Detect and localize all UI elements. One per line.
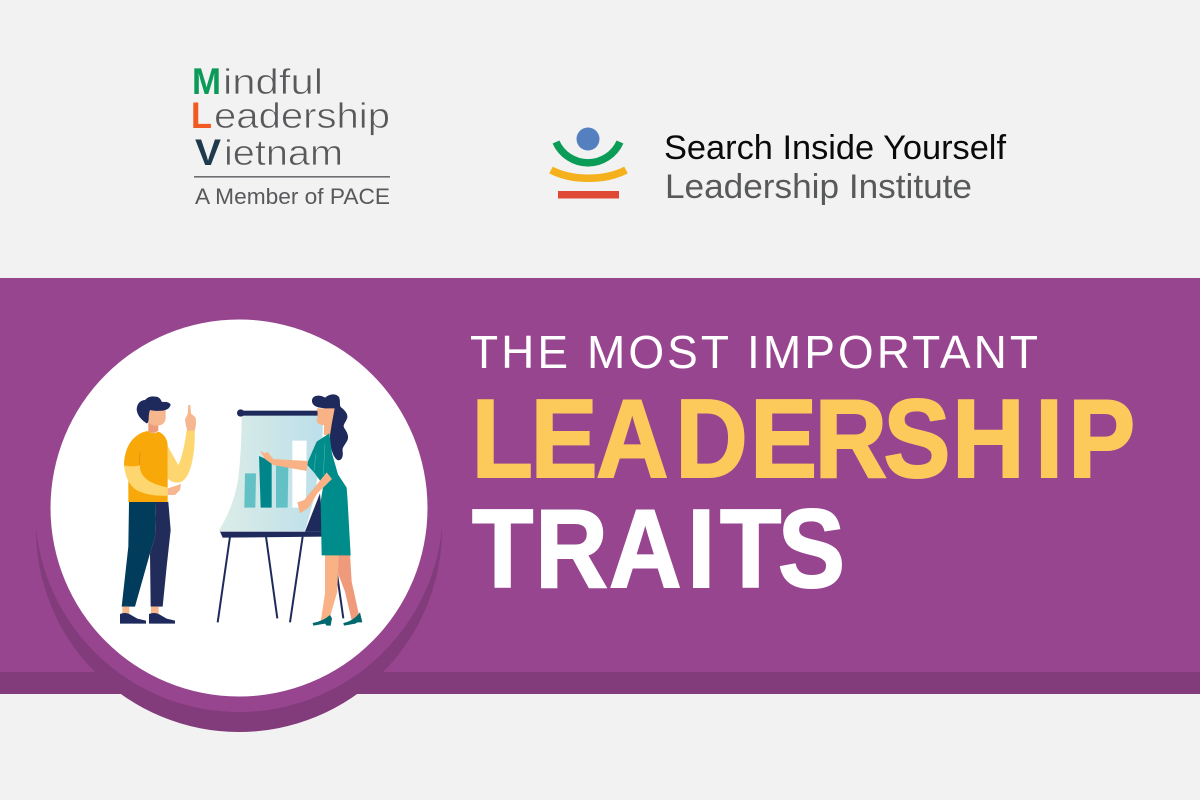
- man shoes: [120, 607, 175, 624]
- logo: Mindful Leadership Vietnam: L: [191, 95, 212, 136]
- woman hair: [312, 394, 348, 460]
- logo: Mindful Leadership Vietnam: M: [192, 61, 221, 102]
- logo: Mindful Leadership Vietnam: A Member of PACE: [195, 184, 390, 209]
- circle badge shadow and ring: [35, 304, 443, 732]
- woman dress: [307, 433, 351, 555]
- title line: THE MOST IMPORTANT: THE MOST IMPORTANT: [470, 326, 1038, 378]
- woman legs and shoes: [313, 553, 362, 626]
- logo: Mindful Leadership Vietnam: V: [195, 132, 221, 173]
- title line: TRAITS: TRAITS: [472, 487, 845, 611]
- logo: Mindful Leadership Vietnam: eadership: [214, 95, 390, 136]
- man head: [137, 396, 171, 433]
- logo text: Search Inside Yourself Leadership Institute: [664, 129, 1007, 206]
- woman head: [317, 408, 335, 435]
- illustration: man presenting: [120, 396, 196, 624]
- purple banner: [0, 278, 1200, 694]
- man trousers: [122, 502, 171, 607]
- woman arms: [260, 443, 332, 513]
- logo: Mindful Leadership Vietnam: indful: [223, 61, 323, 102]
- logo: Mindful Leadership Vietnam: [191, 61, 390, 209]
- flip chart board: [218, 409, 323, 538]
- logo: Search Inside Yourself icon: [551, 128, 626, 198]
- man forearm: [124, 452, 181, 496]
- illustration: woman with flip chart: [218, 394, 362, 626]
- logo text: Search Inside Yourself Leadership Institute: Leadership Institute: [665, 168, 972, 206]
- logo: Mindful Leadership Vietnam: ietnam: [224, 132, 343, 173]
- man sweater: [124, 431, 168, 502]
- title: [470, 326, 1135, 611]
- logo text: Search Inside Yourself Leadership Institute: Search Inside Yourself: [664, 129, 1007, 167]
- easel legs: [218, 537, 343, 622]
- man raised arm: [168, 405, 196, 483]
- bar chart: [244, 441, 307, 508]
- title line: LEADERSHIP: LEADERSHIP: [472, 377, 1135, 501]
